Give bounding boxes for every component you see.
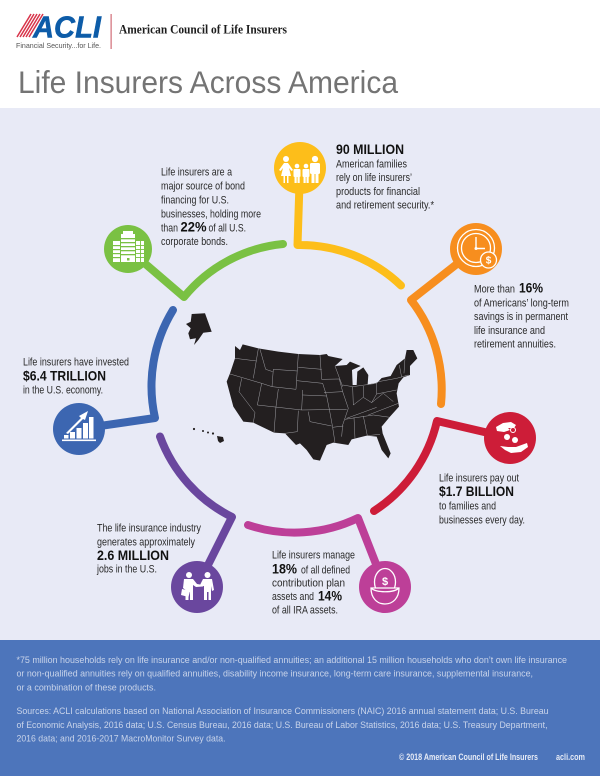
- text: jobs: The life insurance industry: [97, 522, 201, 534]
- connector arc blue: [79, 310, 173, 429]
- text: daily payouts: businesses every day.: [439, 514, 525, 526]
- footnote: or non-qualified annuities rely on qualified annuities, disability income insurance, long-term care insurance, supplemental insurance,: [16, 668, 533, 679]
- footnote: *75 million households rely on life insurance and/or non-qualified annuities; an additional 15 million households who don’t own life insurance: [16, 654, 567, 665]
- text: families: products for financial: [336, 186, 420, 198]
- text: long-term savings: More than: [474, 283, 515, 295]
- text: families: [336, 141, 435, 212]
- text: daily payouts: to families and: [439, 500, 496, 512]
- text: long-term savings: of Americans’ long-term: [474, 297, 569, 309]
- connector arc red: [374, 421, 510, 511]
- connector arc magenta: [248, 518, 385, 587]
- text: retirement assets: Life insurers manage: [272, 550, 355, 562]
- panel: jobs: [96, 436, 232, 613]
- text: jobs: generates approximately: [97, 536, 195, 548]
- icon: nest egg: $: [382, 576, 388, 588]
- text: economy investment: [23, 357, 129, 396]
- icon: office buildings: [104, 225, 152, 273]
- sources: 2016 data; and 2016-2017 MacroMonitor Survey data.: [16, 733, 226, 744]
- text: retirement assets: of all IRA assets.: [272, 605, 338, 617]
- text: bond financing: corporate bonds.: [161, 236, 228, 248]
- icon: clock and dollar: $: [486, 256, 492, 266]
- organisation name: American Council of Life Insurers: [119, 22, 287, 36]
- sources: of Economic Analysis, 2016 data; U.S. Census Bureau, 2016 data; U.S. Bureau of Labor Statistics, 2016 data; U.S. Treasury Department,: [16, 719, 548, 730]
- logo wordmark: ACLI: [32, 10, 102, 44]
- text: families: American families: [336, 158, 407, 170]
- Alaska: [186, 313, 212, 345]
- text: families: rely on life insurers’: [336, 172, 412, 184]
- text: long-term savings: life insurance and: [474, 325, 545, 337]
- text: daily payouts: $1.7 BILLION: [439, 483, 514, 499]
- sources: Sources: ACLI calculations based on National Association of Insurance Commissioners (NAIC) 2016 annual statement data; U.S. Bureau: [16, 705, 548, 716]
- text: retirement assets: 14%: [318, 587, 342, 603]
- text: economy investment: $6.4 TRILLION: [23, 368, 106, 384]
- panel: families: [274, 141, 435, 286]
- logo tagline: Financial Security...for Life.: [16, 41, 101, 50]
- text: bond financing: of all U.S.: [208, 222, 246, 234]
- footer band: [0, 640, 600, 776]
- website: acli.com: [556, 752, 585, 763]
- connector arc yellow: [298, 168, 401, 286]
- header logo: [16, 10, 102, 50]
- icon: family: [274, 142, 326, 194]
- panel: economy investment: [23, 310, 173, 455]
- text: bond financing: than: [161, 222, 178, 234]
- text: economy investment: Life insurers have invested: [23, 357, 129, 369]
- text: long-term savings: savings is in permanent: [474, 311, 568, 323]
- logo stripes: [17, 14, 43, 37]
- text: bond financing: [161, 167, 261, 248]
- text: bond financing: financing for U.S.: [161, 194, 229, 206]
- text: jobs: [96, 522, 201, 576]
- text: retirement assets: [272, 550, 355, 617]
- panel: long-term savings: [411, 223, 569, 404]
- connector arc orange: [411, 249, 476, 404]
- icon: clock and dollar: [450, 223, 502, 275]
- text: daily payouts: Life insurers pay out: [439, 473, 519, 485]
- text: daily payouts: [439, 473, 525, 526]
- sources: [16, 705, 548, 744]
- connector arc purple: [160, 436, 232, 587]
- text: bond financing: businesses, holding more: [161, 208, 261, 220]
- panel: bond financing: [104, 167, 283, 297]
- Hawaii: [193, 428, 224, 443]
- text: economy investment: in the U.S. economy.: [23, 384, 103, 396]
- text: long-term savings: retirement annuities.: [474, 338, 556, 350]
- icon: growth chart: [53, 403, 105, 455]
- text: retirement assets: of all defined: [301, 564, 350, 576]
- title: Life Insurers Across America: [18, 64, 398, 100]
- copyright: © 2018 American Council of Life Insurers: [399, 752, 538, 763]
- text: jobs: 2.6 MILLION: [97, 547, 169, 563]
- text: bond financing: 22%: [180, 218, 207, 234]
- text: retirement assets: contribution plan: [272, 578, 345, 590]
- header divider: [111, 14, 112, 49]
- text: retirement assets: 18%: [272, 560, 297, 576]
- text: long-term savings: [474, 280, 569, 350]
- icon: hands and coins: [484, 412, 536, 464]
- footnote: [16, 654, 567, 692]
- text: jobs: jobs in the U.S.: [96, 564, 157, 576]
- contiguous states: [227, 344, 417, 461]
- map of the United States: [186, 313, 417, 461]
- text: long-term savings: 16%: [519, 280, 543, 296]
- background panel: [0, 108, 600, 640]
- footnote: or a combination of these products.: [16, 682, 156, 692]
- panel: retirement assets: [248, 518, 411, 617]
- text: families: and retirement security.*: [336, 200, 435, 212]
- icon: nest egg: [359, 561, 411, 613]
- text: families: 90 MILLION: [336, 141, 404, 157]
- text: retirement assets: assets and: [272, 591, 314, 603]
- connector arc green: [128, 244, 283, 297]
- panel: daily payouts: [374, 412, 536, 526]
- text: bond financing: major source of bond: [161, 181, 245, 193]
- icon: handshake: [171, 561, 223, 613]
- text: bond financing: Life insurers are a: [161, 167, 232, 179]
